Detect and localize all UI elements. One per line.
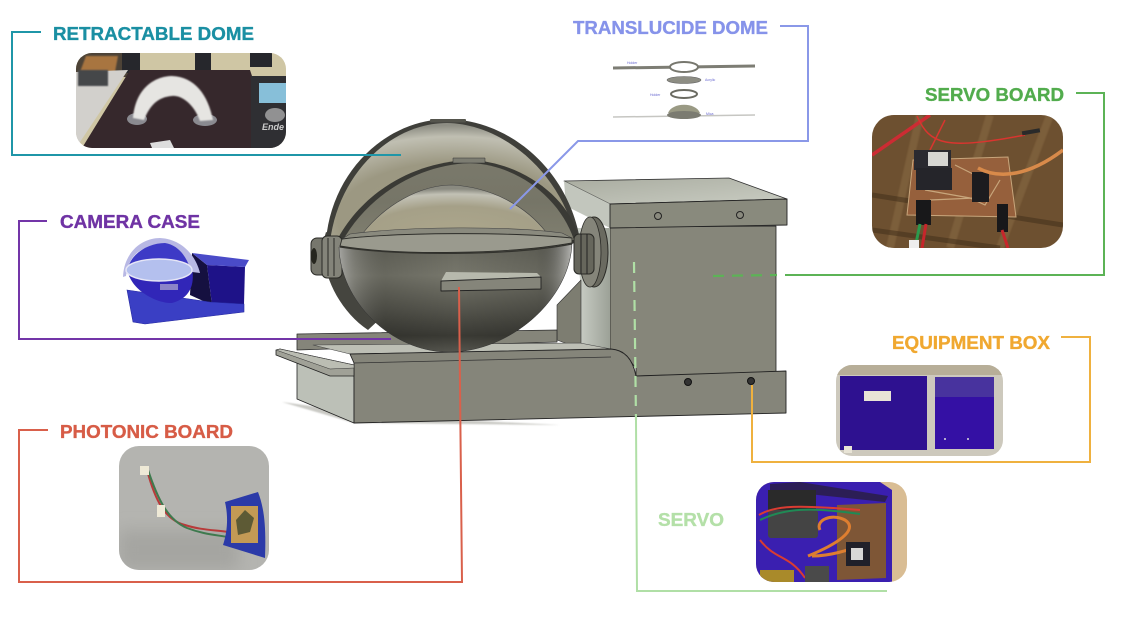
exploded view of dome parts: Mica xyxy=(706,112,713,116)
exploded view of dome parts: Holder xyxy=(627,61,638,65)
heading: camera case: CAMERA CASE xyxy=(60,212,200,232)
retractable outer dome xyxy=(326,119,580,245)
photo: servo wiring inside box xyxy=(756,482,907,582)
rear outer hemisphere underside xyxy=(323,232,400,330)
leader line: photonic board xyxy=(19,287,462,582)
right pivot flange xyxy=(574,217,608,287)
sphere rim xyxy=(340,228,572,253)
leader line: servo board xyxy=(785,93,1104,275)
heading: retractable dome: RETRACTABLE DOME xyxy=(53,24,254,44)
translucent dome xyxy=(363,185,546,240)
callout: servo board xyxy=(713,85,1104,276)
central dome camera case 3D model xyxy=(276,119,787,425)
dashed continuation: servo xyxy=(634,262,636,420)
lower sphere xyxy=(339,243,572,352)
callout: photonic board xyxy=(19,287,462,582)
heading: translucide dome: TRANSLUCIDE DOME xyxy=(573,18,768,38)
base plate xyxy=(276,330,786,423)
exploded view of dome parts xyxy=(613,61,755,119)
equipment box body xyxy=(564,178,787,376)
dashed continuation: servo board xyxy=(713,275,777,276)
exploded view of dome parts: Acrylic xyxy=(705,78,716,82)
leader line: equipment box xyxy=(752,337,1090,462)
ground shadow xyxy=(282,402,560,425)
leader line: servo xyxy=(636,420,887,591)
callout: retractable dome xyxy=(12,24,401,155)
photonic board slot xyxy=(441,272,541,291)
left pivot knob xyxy=(311,236,342,278)
render: blue camera case xyxy=(123,238,249,324)
callout: translucide dome xyxy=(510,18,808,209)
leader line: camera case xyxy=(19,221,391,339)
callout: camera case xyxy=(19,212,391,339)
rear support wall xyxy=(557,228,610,349)
photo: photonic board with wires xyxy=(119,446,269,570)
photo: purple acrylic panels xyxy=(836,365,1003,456)
photo: printed retractable dome xyxy=(76,53,286,148)
photo: printed retractable dome: Ende xyxy=(262,122,284,132)
heading: servo: SERVO xyxy=(658,510,724,530)
heading: equipment box: EQUIPMENT BOX xyxy=(892,333,1050,353)
photo: servo circuit board xyxy=(872,115,1063,250)
leader line: retractable dome xyxy=(12,32,401,155)
leader line: translucide dome xyxy=(510,26,808,209)
exploded view of dome parts: Holder xyxy=(650,93,661,97)
inner dome housing xyxy=(336,158,577,244)
heading: servo board: SERVO BOARD xyxy=(925,85,1064,105)
heading: photonic board: PHOTONIC BOARD xyxy=(60,422,233,442)
callout: equipment box xyxy=(752,333,1090,462)
callout: servo xyxy=(634,262,907,591)
